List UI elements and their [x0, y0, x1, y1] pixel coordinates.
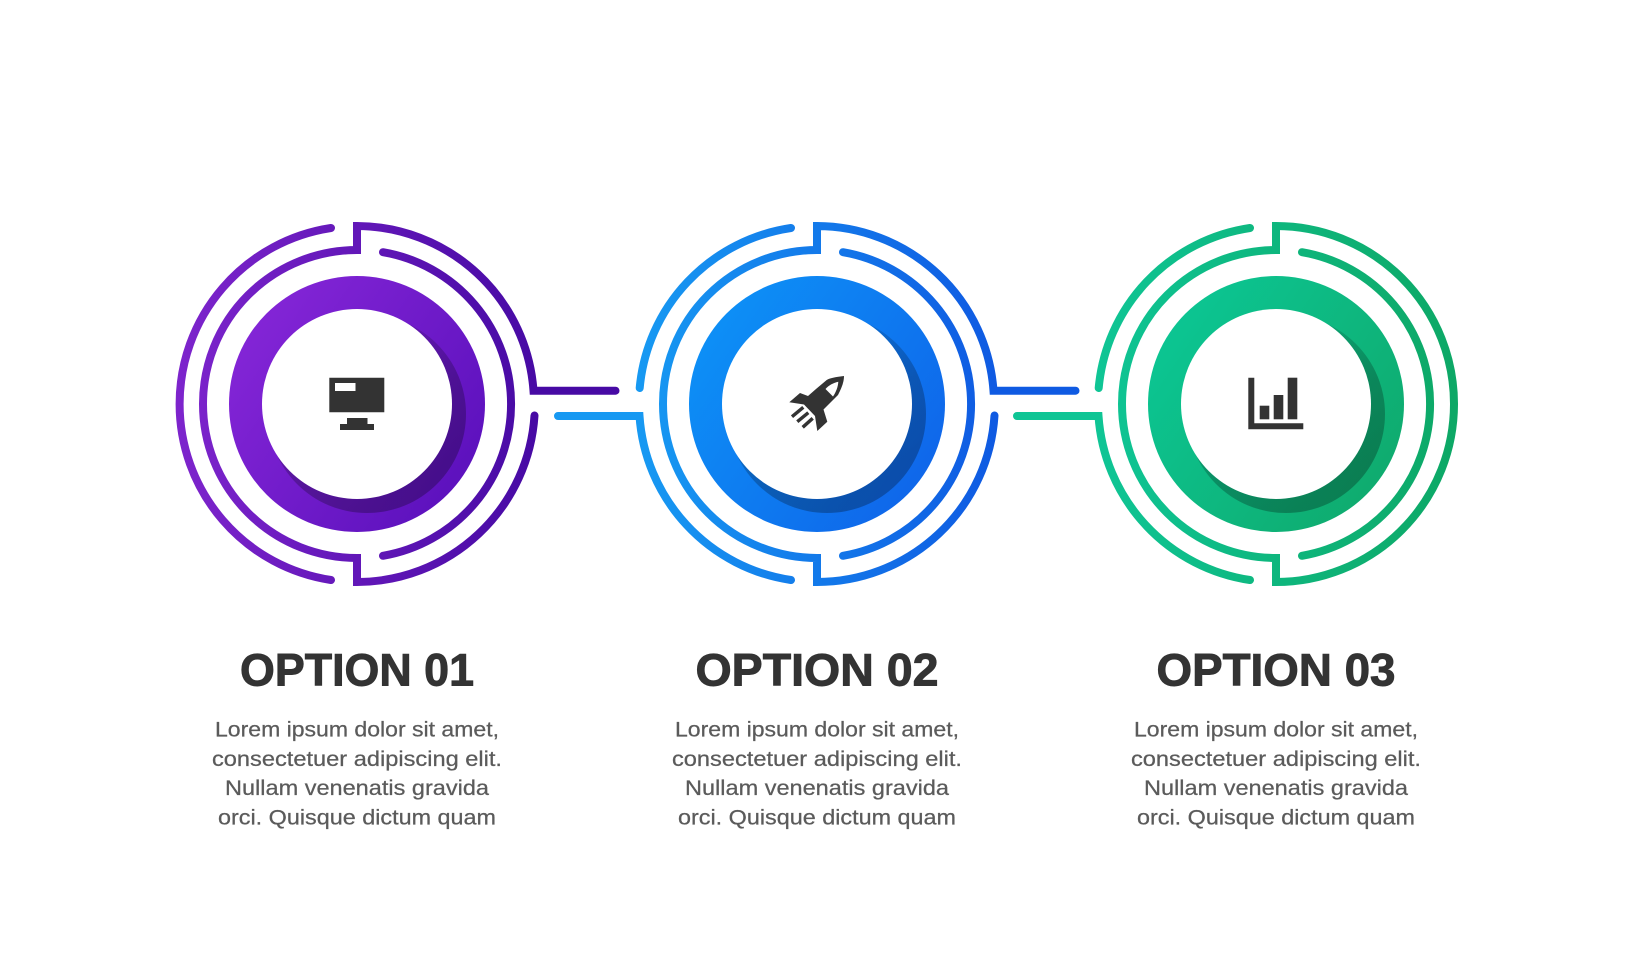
white centre: [1181, 309, 1371, 499]
text block: option 03: orci. Quisque dictum quam: [1137, 807, 1415, 830]
white centre: [262, 309, 452, 499]
left lower arc with connector: [558, 416, 791, 580]
text block: option 02: consectetuer adipiscing elit.: [672, 748, 962, 771]
white centre: [722, 309, 912, 499]
text block: option 03: Nullam venenatis gravida: [1144, 777, 1408, 800]
text block: option 02: Lorem ipsum dolor sit amet,: [675, 719, 959, 742]
text block: option 03: Lorem ipsum dolor sit amet,: [1134, 719, 1418, 742]
right inner arc: [383, 252, 511, 556]
text block: option 03: consectetuer adipiscing elit.: [1131, 748, 1421, 771]
outer line path with connector: [663, 226, 1076, 582]
text block: option 03: [1131, 719, 1421, 830]
text block: option 01: orci. Quisque dictum quam: [218, 807, 496, 830]
panel: option 02 circle: [558, 226, 1076, 582]
text block: option 01: Lorem ipsum dolor sit amet,: [215, 719, 499, 742]
text block: option 01: consectetuer adipiscing elit.: [212, 748, 502, 771]
ring inner shadow: [268, 315, 466, 513]
ring inner shadow: [728, 315, 926, 513]
text block: option 02: [672, 719, 962, 830]
text block: option 01: [212, 719, 502, 830]
text block: option 02: orci. Quisque dictum quam: [678, 807, 956, 830]
gradient ring: [229, 276, 485, 532]
heading: option 01: OPTION 01: [240, 644, 474, 696]
heading: option 03: OPTION 03: [1156, 644, 1396, 696]
left upper arc: [640, 228, 791, 388]
icon: bar chart: [1248, 378, 1303, 429]
icon: monitor: [329, 378, 384, 430]
icon: rocket: [789, 376, 844, 431]
outer line path with connector: [203, 226, 616, 582]
panel: option 01 circle: [180, 226, 616, 582]
gradient ring: [1148, 276, 1404, 532]
gradient ring: [689, 276, 945, 532]
left outer arc: [180, 228, 331, 580]
right inner arc: [1302, 252, 1430, 556]
outer line path, continuous on the right: [1122, 226, 1454, 582]
heading: option 02: OPTION 02: [696, 644, 938, 696]
text block: option 02: Nullam venenatis gravida: [685, 777, 949, 800]
left lower arc with connector: [1017, 416, 1250, 580]
text block: option 01: Nullam venenatis gravida: [225, 777, 489, 800]
ring inner shadow: [1187, 315, 1385, 513]
panel: option 03 circle: [1017, 226, 1454, 582]
left upper arc: [1099, 228, 1250, 388]
right inner arc: [843, 252, 971, 556]
